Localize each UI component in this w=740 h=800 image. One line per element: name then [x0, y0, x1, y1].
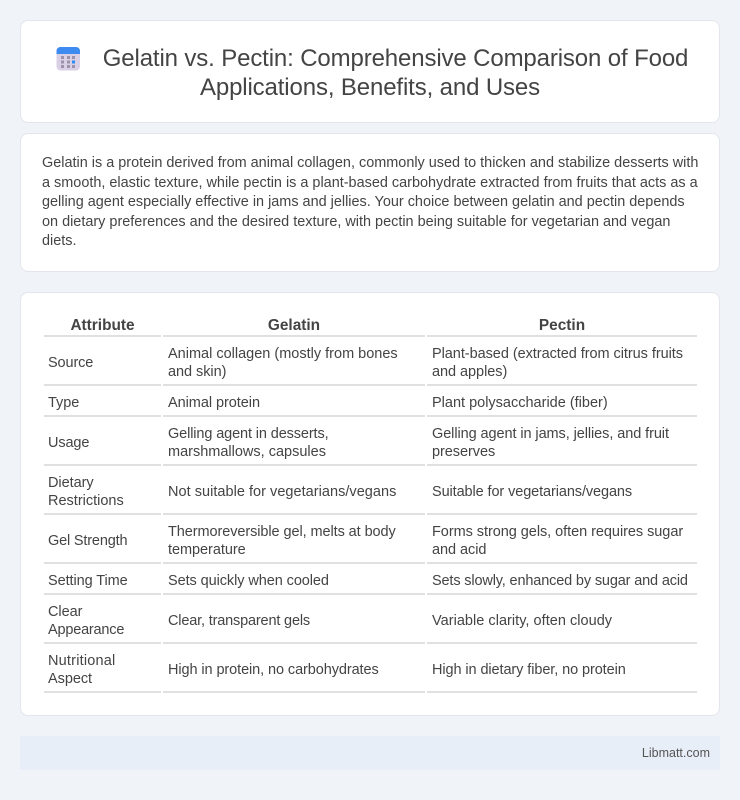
- row: usage: Usage: [48, 435, 89, 451]
- row: dietary restrictions: Restrictions: [48, 493, 124, 509]
- row: clear appearance: Appearance: [48, 622, 124, 638]
- row: type: [48, 395, 608, 411]
- title: Gelatin vs. Pectin: Comprehensive Comparison of Food: [103, 45, 688, 72]
- intro text: Gelatin is a protein derived from animal collagen, commonly used to thicken and stabilize desserts with: [42, 155, 698, 171]
- icon: calendar: [56, 47, 80, 70]
- header: pectin: Pectin: [539, 317, 585, 334]
- row: nutritional aspect: [48, 653, 626, 687]
- row: setting time: Setting Time: [48, 573, 128, 589]
- row: setting time: [48, 573, 688, 589]
- row: gel strength: Thermoreversible gel, melts at body: [168, 524, 396, 540]
- intro text: a smooth, elastic texture, while pectin is a plant-based carbohydrate extracted from fruits that acts as a: [42, 175, 698, 191]
- row: type: Type: [48, 395, 79, 411]
- panel: intro card: [20, 133, 720, 272]
- panel: comparison table card: [20, 292, 720, 716]
- row: usage: preserves: [432, 444, 495, 460]
- row: dietary restrictions: Not suitable for vegetarians/vegans: [168, 484, 396, 500]
- row: usage: Gelling agent in jams, jellies, and fruit: [432, 426, 669, 442]
- intro text: [42, 155, 698, 249]
- title: Applications, Benefits, and Uses: [200, 74, 540, 101]
- header: gelatin: Gelatin: [268, 317, 320, 334]
- row: source: [48, 346, 683, 380]
- row: nutritional aspect: High in dietary fiber, no protein: [432, 662, 626, 678]
- row: dietary restrictions: [48, 475, 632, 509]
- row: source: and skin): [168, 364, 226, 380]
- row: nutritional aspect: Nutritional: [48, 653, 115, 669]
- row: clear appearance: [48, 604, 612, 638]
- row: dietary restrictions: Dietary: [48, 475, 94, 491]
- comparison table: [44, 317, 697, 693]
- row: usage: [48, 426, 669, 460]
- header: attribute: Attribute: [70, 317, 135, 334]
- title: [103, 45, 688, 101]
- row: gel strength: Forms strong gels, often requires sugar: [432, 524, 683, 540]
- intro text: diets.: [42, 233, 77, 249]
- footer bar: [20, 736, 720, 770]
- panel: title card: [20, 20, 720, 123]
- row: nutritional aspect: High in protein, no carbohydrates: [168, 662, 379, 678]
- intro text: gelling agent especially effective in jams and jellies. Your choice between gelatin and pectin depends: [42, 194, 685, 210]
- row: usage: Gelling agent in desserts,: [168, 426, 329, 442]
- row: source: Animal collagen (mostly from bones: [168, 346, 398, 362]
- row: gel strength: temperature: [168, 542, 246, 558]
- row: usage: marshmallows, capsules: [168, 444, 326, 460]
- row: gel strength: and acid: [432, 542, 486, 558]
- row: source: Plant-based (extracted from citrus fruits: [432, 346, 683, 362]
- row: source: and apples): [432, 364, 507, 380]
- row: setting time: Sets slowly, enhanced by sugar and acid: [432, 573, 688, 589]
- row: source: Source: [48, 355, 93, 371]
- row: dietary restrictions: Suitable for vegetarians/vegans: [432, 484, 632, 500]
- row: type: Animal protein: [168, 395, 260, 411]
- row: gel strength: Gel Strength: [48, 533, 127, 549]
- row: clear appearance: Variable clarity, often cloudy: [432, 613, 612, 629]
- row: clear appearance: Clear, transparent gels: [168, 613, 310, 629]
- row: nutritional aspect: Aspect: [48, 671, 92, 687]
- row: gel strength: [48, 524, 683, 558]
- row: setting time: Sets quickly when cooled: [168, 573, 329, 589]
- row: type: Plant polysaccharide (fiber): [432, 395, 608, 411]
- intro text: on dietary preferences and the desired texture, with pectin being suitable for vegetarian and vegan: [42, 214, 670, 230]
- row: clear appearance: Clear: [48, 604, 82, 620]
- footer text: Libmatt.com: [642, 746, 710, 760]
